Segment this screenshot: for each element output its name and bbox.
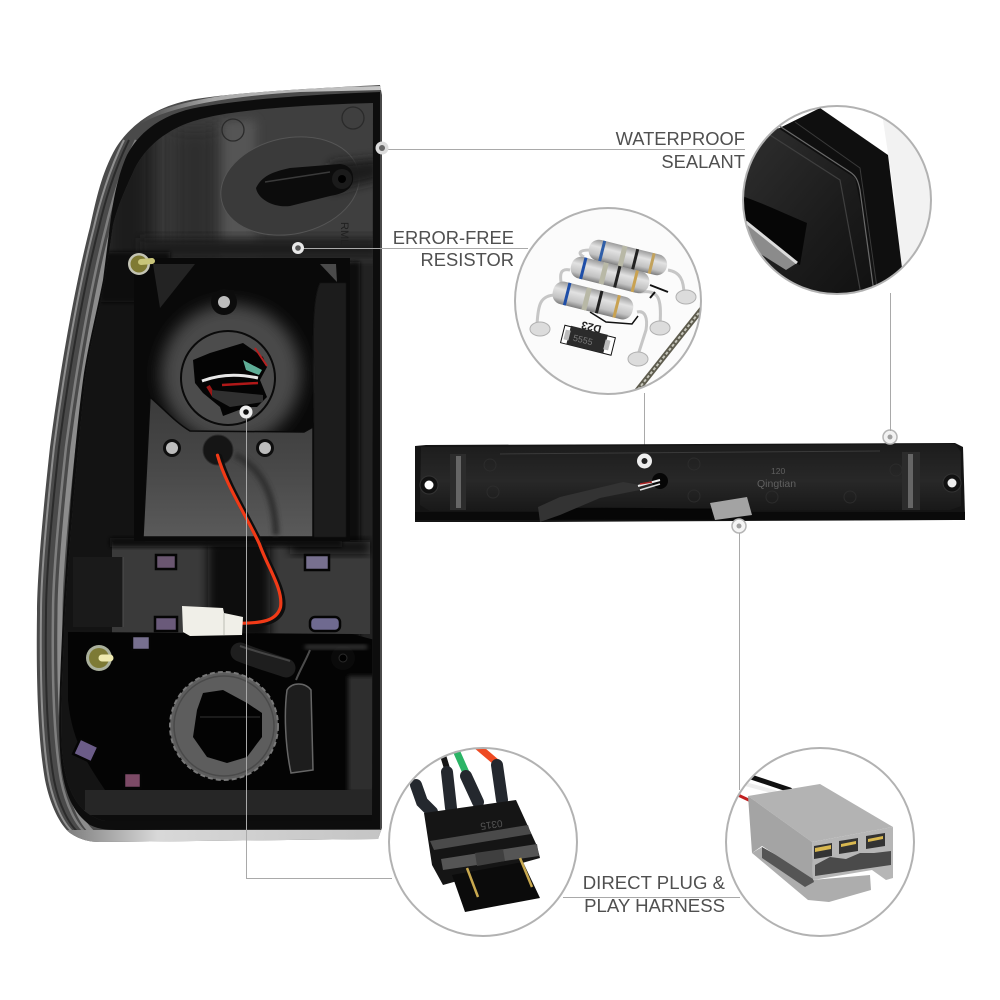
- wire grommet: [203, 435, 233, 465]
- detail circle: gray connector: [726, 748, 914, 936]
- connector front face: [812, 827, 893, 880]
- bar bottom shadow: [415, 512, 965, 520]
- moulded text: Qingtian: [757, 478, 796, 490]
- plug tongue: [452, 862, 540, 912]
- leader line to resistor: [298, 248, 528, 250]
- label line two: RESISTOR: [421, 249, 514, 270]
- plug lower band: [441, 844, 539, 870]
- leader marker sealant: [883, 430, 897, 444]
- heat shrink tubes: [416, 765, 502, 812]
- connector side face: [748, 796, 813, 879]
- rear bulb collar: [170, 672, 278, 780]
- right dark column: [358, 262, 372, 640]
- white inline connector: [182, 606, 243, 636]
- sheathed cable: [538, 480, 660, 522]
- plug body: [424, 800, 540, 885]
- label text line one: DIRECT PLUG &: [583, 872, 726, 893]
- threaded stud bottom: [86, 645, 112, 671]
- detail circle: [515, 208, 705, 394]
- cover screws: [163, 439, 274, 457]
- lower gray zone: [112, 542, 370, 634]
- top lip highlight: [140, 88, 382, 122]
- third brake light bar: [415, 430, 965, 533]
- moulded circular marks: [222, 106, 364, 142]
- lower cover plate: [143, 397, 313, 537]
- bottom lip highlight: [66, 830, 381, 842]
- left dark column: [64, 296, 134, 632]
- wire shadow: [235, 455, 276, 535]
- infographic canvas: [36, 85, 965, 937]
- callout: direct plug and play harness: [240, 406, 914, 936]
- plug upper band: [430, 825, 531, 850]
- marker dot: [376, 142, 388, 154]
- bare wires: [441, 749, 498, 772]
- board marking: D23: [580, 318, 603, 335]
- tail light rear housing: [30, 80, 390, 850]
- lower thin cable: [548, 508, 712, 520]
- label: ERROR-FREE: [393, 227, 514, 248]
- gold pins: [467, 858, 532, 897]
- red and black wire: [218, 455, 283, 624]
- resistor bottom: [552, 282, 634, 320]
- connector lower tab: [752, 847, 871, 902]
- lower black pocket: [68, 632, 375, 790]
- gray connector: [710, 497, 752, 520]
- marker harness: [732, 519, 746, 533]
- gold terminals: [815, 836, 883, 852]
- wire hole: [652, 473, 668, 489]
- label text line two: PLAY HARNESS: [584, 895, 725, 916]
- part number text: 0315: [479, 817, 503, 831]
- housing black rim: [59, 92, 380, 830]
- mounting hole left: [420, 476, 438, 494]
- leader line bar to connector: [738, 533, 740, 790]
- solder pads: [530, 290, 696, 366]
- right end ribs: [902, 452, 920, 510]
- dome highlight: [161, 304, 301, 444]
- detail circle: black plug: [389, 745, 577, 936]
- threaded stud top: [128, 253, 152, 275]
- label line two: SEALANT: [661, 151, 745, 172]
- rubber vent tube: [240, 645, 367, 773]
- detail circle: [742, 105, 932, 295]
- moulded text: 120: [771, 466, 785, 476]
- resistor top: [588, 240, 667, 276]
- callout: error-free resistor: [292, 208, 705, 459]
- surface mount diode: 5555: [572, 333, 594, 347]
- key opening: [815, 851, 891, 876]
- retaining clips: [73, 555, 340, 788]
- callout: waterproof sealant: [376, 100, 945, 300]
- leader line sealant to bar: [890, 293, 892, 431]
- bulb socket ring and opening: [181, 331, 275, 425]
- moulded text: [757, 466, 796, 490]
- mounting hole right: [943, 474, 961, 492]
- mount oval with stud: [220, 136, 373, 236]
- top screw: [211, 289, 237, 315]
- lower left dark corner: [61, 643, 105, 810]
- connector top face: [748, 784, 893, 842]
- leader line to bar: [644, 393, 646, 459]
- leader line housing to plug: [246, 418, 392, 878]
- resistor middle: [570, 256, 650, 294]
- bar body: [415, 443, 965, 522]
- PCB trace: [590, 312, 638, 324]
- moulded part text: RML: [338, 222, 350, 245]
- marker dot housing: [240, 406, 252, 418]
- leader line between circles: [563, 896, 740, 898]
- connector slot shadow: [762, 847, 814, 887]
- braided wire: [635, 307, 700, 389]
- moulded round marks: [484, 458, 902, 503]
- resistor leads: [537, 250, 684, 355]
- marker resistor: [637, 454, 652, 468]
- label: WATERPROOF: [616, 128, 745, 149]
- bar top ridge: [500, 451, 880, 454]
- connector wires: [738, 776, 790, 803]
- leader line to sealant: [382, 148, 745, 150]
- bulb cover pocket: [134, 258, 350, 541]
- left end ribs: [450, 454, 466, 510]
- marker dot: [292, 242, 304, 254]
- terminal openings: [814, 833, 885, 859]
- surface mount diode: [561, 324, 616, 355]
- plug centre tab: [475, 849, 505, 866]
- housing outer lens rim with stripes: [30, 80, 390, 850]
- housing back plate: [55, 100, 380, 825]
